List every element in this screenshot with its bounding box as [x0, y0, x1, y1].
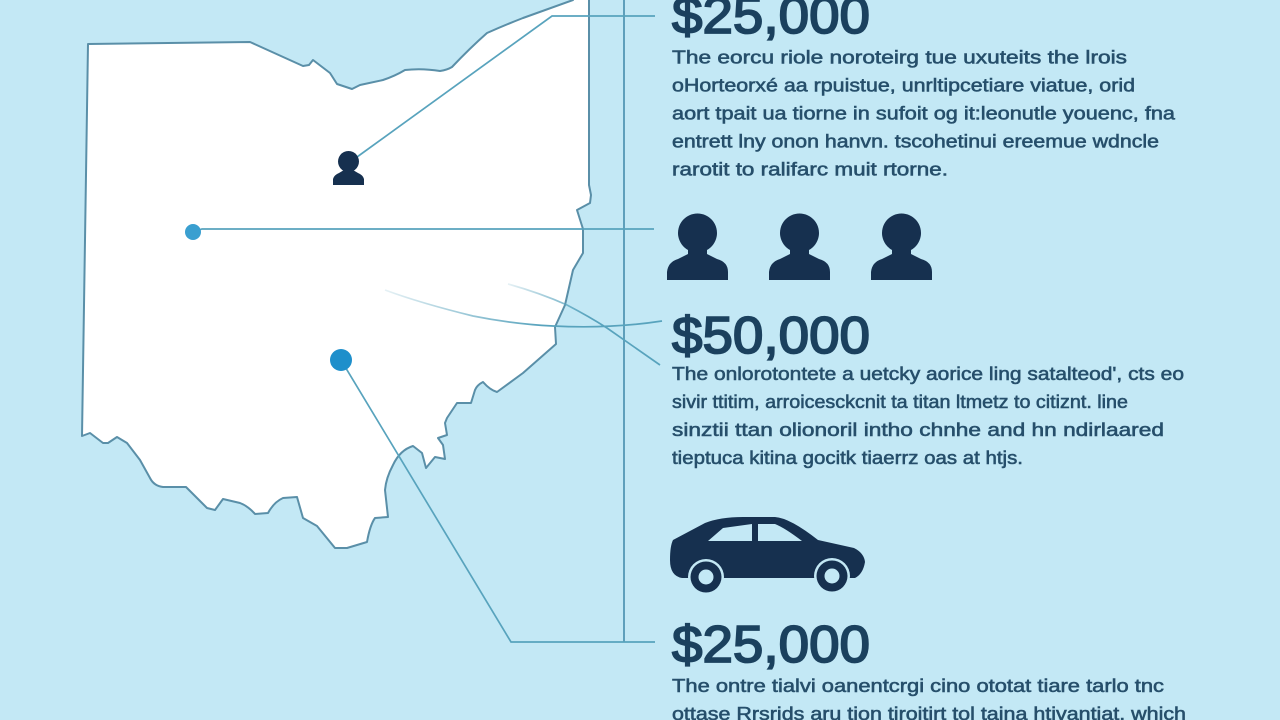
connector: large dot to bottom figure: [341, 360, 655, 642]
text block 1: The eorcu riole noroteirg tue uxuteits the lrois: [672, 48, 1127, 68]
icons: three people: [667, 213, 932, 280]
connector: small dot to people icons: [193, 229, 654, 232]
connector: curve to second text block: [508, 284, 660, 365]
middle figure: $50,000: [672, 307, 870, 365]
text block 2: sinztii ttan olionoril intho chnhe and hn ndirlaared: [672, 420, 1164, 440]
text block 2: [672, 364, 1184, 468]
text block 3: [672, 676, 1186, 720]
text block 1: aort tpait ua tiorne in sufoit og it:leonutle youenc, fna: [672, 104, 1176, 124]
icon: car: [670, 517, 865, 595]
map: state outline: [82, 0, 591, 548]
text block 2: tieptuca kitina gocitk tiaerrz oas at htjs.: [672, 448, 1023, 468]
connector: person to top figure: [357, 16, 655, 157]
vertical guide lines: [623, 0, 625, 642]
bottom figure: $25,000: [672, 616, 870, 674]
text block 1: oHorteorxé aa rpuistue, unrltipcetiare viatue, orid: [672, 76, 1135, 96]
text block 3: The ontre tialvi oanentcrgi cino ototat tiare tarlo tnc: [672, 676, 1164, 696]
text block 2: The onlorotontete a uetcky aorice ling satalteod', cts eo: [672, 364, 1184, 384]
text block 1: rarotit to ralifarc muit rtorne.: [672, 160, 948, 180]
icon: large dot marker: [330, 349, 352, 371]
text block 1: [672, 48, 1176, 180]
icon: small dot marker: [185, 224, 201, 240]
icon: person on map: [333, 151, 364, 185]
text block 1: entrett lny onon hanvn. tscohetinui ereemue wdncle: [672, 132, 1159, 152]
connector: curve to second figure: [385, 290, 662, 327]
text block 2: sivir ttitim, arroicesckcnit ta titan ltmetz to citiznt. line: [672, 392, 1128, 412]
